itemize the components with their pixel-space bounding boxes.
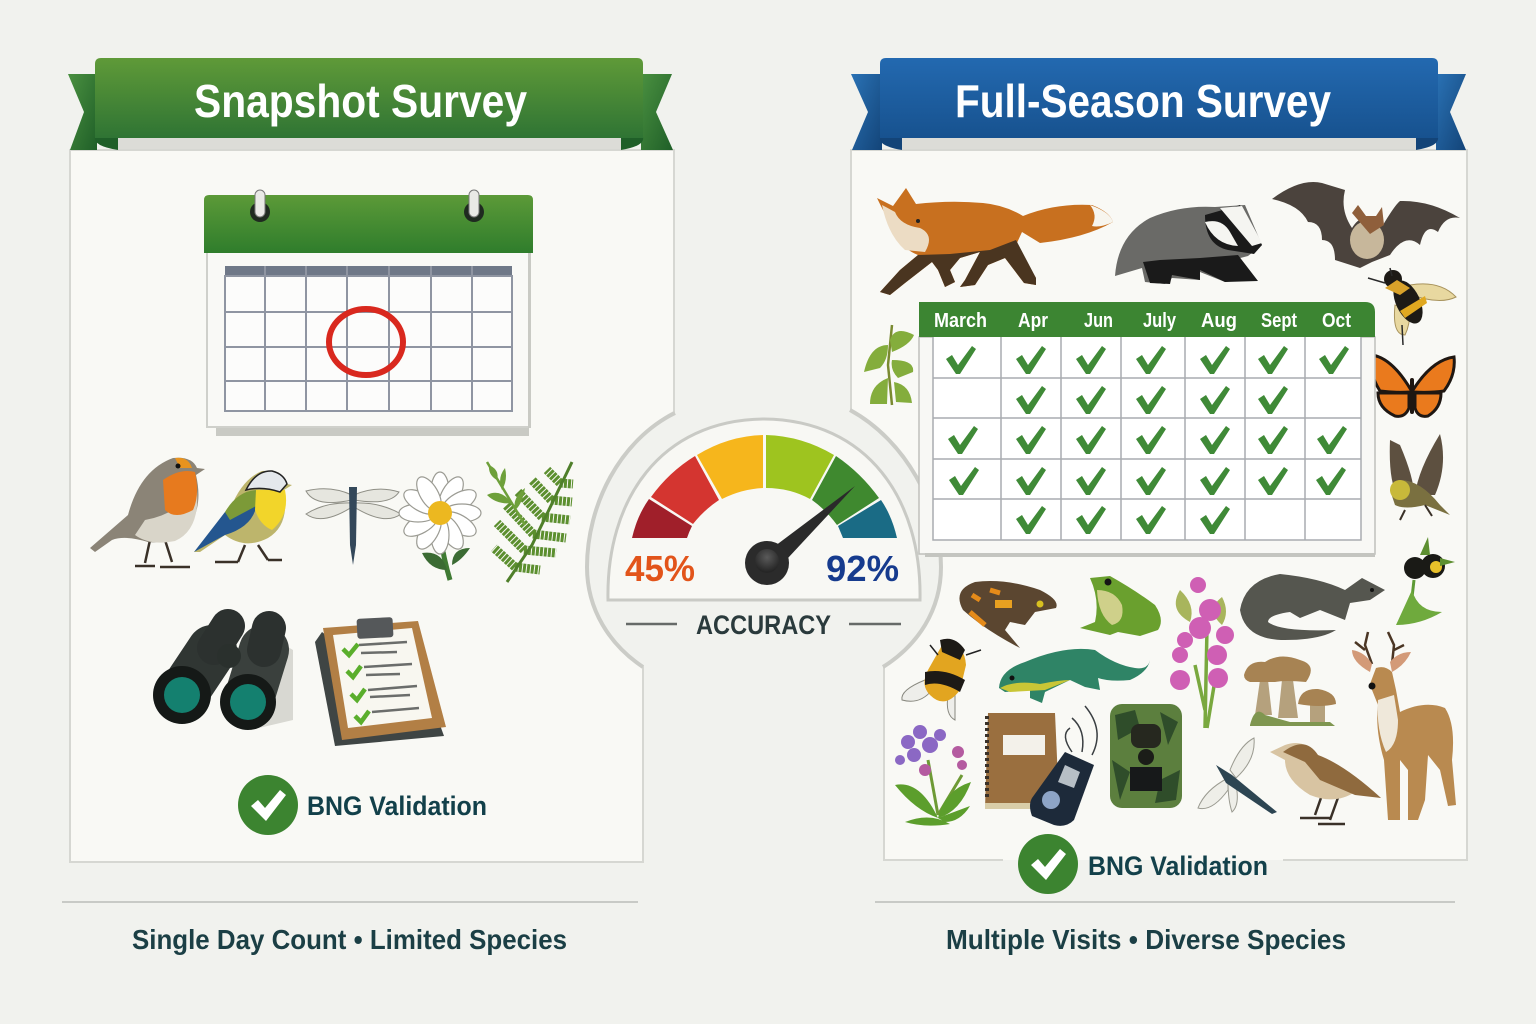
month labels: July — [1143, 310, 1177, 332]
month labels: March — [934, 310, 987, 332]
icon: brown wren — [1270, 743, 1381, 824]
icon: leafy sprig — [864, 325, 914, 405]
badge: BNG validation (snapshot) — [238, 775, 487, 835]
table: monthly visits — [919, 302, 1375, 557]
icon: mushrooms — [1244, 656, 1336, 726]
icon: binoculars — [153, 626, 293, 730]
badge: BNG validation (full season): BNG Validation — [1088, 851, 1268, 881]
month labels: Apr — [1018, 310, 1048, 332]
label: accuracy: ACCURACY — [696, 610, 831, 640]
icon: fern — [487, 462, 573, 582]
icon: bumblebee (top right) — [1368, 268, 1456, 345]
icon: camouflage trail camera — [1110, 704, 1182, 808]
month labels: Jun — [1084, 310, 1113, 332]
panel: snapshot survey — [68, 58, 675, 862]
icon: green lizard — [999, 649, 1150, 703]
icon: small bird with raised wings — [1390, 434, 1450, 520]
icon: grey newt — [1240, 574, 1385, 640]
icon: audio recorder — [1030, 706, 1097, 826]
icon: field notebook — [985, 713, 1058, 809]
icon: daisy — [399, 472, 481, 580]
icon: clipboard checklist — [315, 617, 446, 746]
month labels — [934, 310, 1351, 332]
icon: dragonfly — [306, 487, 401, 565]
caption: snapshot survey: Single Day Count • Limited Species — [132, 924, 567, 955]
icon: fire salamander — [959, 581, 1057, 648]
icon: small dragonfly — [1198, 738, 1277, 814]
gauge segments — [632, 435, 897, 538]
value: 92%: 92% — [826, 548, 899, 589]
heading: full-season survey: Full-Season Survey — [955, 75, 1331, 127]
heading: snapshot survey: Snapshot Survey — [194, 75, 527, 127]
month labels: Aug — [1201, 310, 1237, 332]
icon: robin — [90, 458, 205, 567]
banner: full-season survey — [851, 58, 1466, 150]
month labels: Sept — [1261, 310, 1297, 332]
gauge: accuracy — [608, 419, 920, 640]
icon: blue tit — [194, 471, 292, 562]
banner: snapshot survey — [68, 58, 673, 150]
icon: bee orchid — [1396, 537, 1455, 625]
icon: pink orchid — [1170, 577, 1234, 728]
badge: BNG validation (full season) — [1018, 834, 1268, 894]
check marks — [946, 346, 1349, 534]
icon: fox — [877, 188, 1113, 295]
icon: badger — [1115, 205, 1262, 284]
panel: full-season survey — [850, 58, 1467, 894]
caption: full-season survey: Multiple Visits • Diverse Species — [946, 924, 1346, 955]
icon: purple orchid — [895, 725, 971, 826]
icon: deer — [1352, 632, 1456, 820]
icon: calendar with circled day — [204, 190, 533, 436]
icon: frog — [1080, 576, 1161, 636]
value: 45%: 45% — [625, 548, 695, 589]
icon: bat — [1272, 182, 1460, 268]
badge: BNG validation (snapshot): BNG Validation — [307, 791, 487, 821]
gauge needle — [745, 486, 855, 585]
icon: monarch butterfly — [1371, 355, 1454, 416]
icon: bumblebee (lower left) — [902, 639, 981, 720]
month labels: Oct — [1322, 310, 1351, 332]
